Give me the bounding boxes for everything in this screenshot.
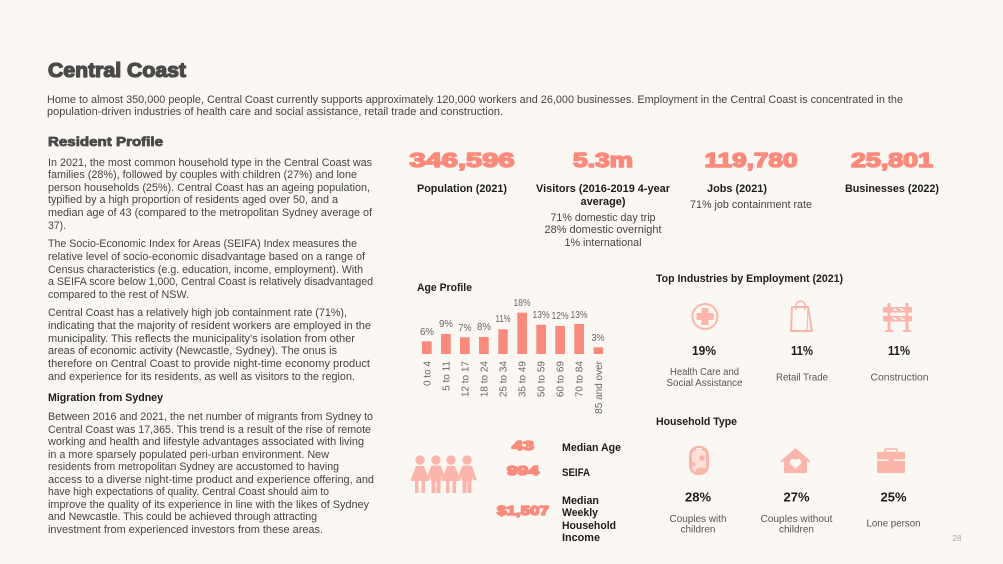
resident profile text: areas of economic activity (Newcastle, Sydney). The onus is bbox=[48, 345, 337, 357]
icon: house with heart bbox=[780, 448, 810, 473]
household: couples with children bbox=[670, 446, 726, 536]
household: couples without children: 27% bbox=[784, 490, 810, 504]
stat: visitors bbox=[536, 150, 671, 249]
stat: median age: Median Age bbox=[562, 442, 621, 454]
industry: construction: 11% bbox=[888, 343, 910, 358]
intro text bbox=[47, 94, 903, 118]
migration text bbox=[47, 411, 374, 536]
industry: retail trade bbox=[776, 301, 828, 384]
migration text: Between 2016 and 2021, the net number of migrants from Sydney to bbox=[48, 411, 373, 423]
resident profile text: indicating that the majority of resident workers are employed in the bbox=[48, 320, 371, 332]
household: lone person: 25% bbox=[880, 490, 907, 504]
bar chart: age profile: 70 to 84 bbox=[574, 361, 586, 397]
bar chart: age profile: 5 to 11 bbox=[442, 361, 452, 391]
stat: visitors: Visitors (2016-2019 4-year bbox=[536, 183, 671, 195]
bar chart: age profile: 18 to 24 bbox=[480, 361, 490, 397]
bar chart: age profile: 25 to 34 bbox=[498, 361, 510, 397]
resident profile text: 37). bbox=[48, 220, 66, 232]
stat: median weekly household income: Income bbox=[562, 532, 600, 544]
heading: migration from sydney: Migration from Sydney bbox=[48, 392, 164, 404]
stat: businesses: 25,801 bbox=[851, 150, 933, 172]
migration text: investment from experienced investors from these areas. bbox=[48, 524, 323, 536]
industry: construction: Construction bbox=[870, 372, 928, 384]
stat: visitors: average) bbox=[580, 196, 626, 208]
stat: population: 346,596 bbox=[410, 150, 514, 172]
industry: retail trade: 11% bbox=[791, 343, 813, 358]
stat: median age bbox=[512, 438, 621, 454]
icon: group of people bbox=[411, 455, 475, 493]
bar chart: age profile: 7% bbox=[458, 323, 472, 334]
bar chart: age profile: 3% bbox=[592, 333, 605, 344]
bar chart: age profile: 18% bbox=[514, 298, 531, 309]
household: couples without children: children bbox=[779, 524, 814, 536]
resident profile text: typified by a high proportion of residents aged over 50, and a bbox=[48, 194, 339, 206]
resident profile text: therefore on Central Coast to provide night-time economy product bbox=[48, 358, 370, 370]
stat: population: Population (2021) bbox=[417, 183, 507, 195]
resident profile text: a SEIFA score below 1,000, Central Coast is relatively disadvantaged bbox=[48, 276, 373, 288]
migration text: have high expectations of quality. Central Coast should aim to bbox=[48, 486, 329, 498]
bar chart: age profile: 8% bbox=[477, 322, 491, 333]
heading: household type: Household Type bbox=[656, 416, 737, 428]
migration text: in a more sparsely populated peri-urban environment. New bbox=[48, 449, 329, 461]
heading: resident profile: Resident Profile bbox=[48, 134, 163, 149]
stat: population bbox=[410, 150, 514, 195]
page number: 28 bbox=[953, 534, 962, 543]
bar chart: age profile: 13% bbox=[570, 310, 588, 321]
resident profile text: municipality. This reflects the municipality's isolation from other bbox=[48, 333, 355, 345]
industry: health care bbox=[666, 304, 743, 389]
household: couples without children: Couples without bbox=[760, 514, 833, 525]
stat: businesses bbox=[845, 150, 939, 195]
heading: age profile: Age Profile bbox=[417, 282, 472, 294]
household: couples with children: 28% bbox=[685, 490, 711, 504]
stat: seifa bbox=[507, 463, 590, 479]
resident profile text bbox=[48, 157, 373, 383]
household: lone person: Lone person bbox=[866, 518, 920, 530]
industry: retail trade: Retail Trade bbox=[776, 372, 828, 384]
bar chart: age profile: 6% bbox=[420, 327, 434, 338]
household: couples without children bbox=[760, 448, 833, 536]
resident profile text: Central Coast has a relatively high job containment rate (71%), bbox=[48, 307, 347, 319]
icon: road barrier bbox=[883, 303, 912, 332]
resident profile text: relative level of socio-economic disadvantage based on a range of bbox=[48, 251, 366, 263]
stat: jobs: Jobs (2021) bbox=[707, 183, 767, 195]
stat: median weekly household income bbox=[497, 495, 616, 544]
household: couples with children: Couples with bbox=[670, 514, 726, 525]
migration text: residents from metropolitan Sydney are accustomed to having bbox=[48, 461, 339, 473]
resident profile text: person households (25%). Central Coast has an ageing population, bbox=[48, 182, 370, 194]
bar chart: age profile: 11% bbox=[496, 314, 511, 325]
stat: median weekly household income: $1,507 bbox=[497, 503, 549, 518]
resident profile text: Census characteristics (e.g. education, income, employment). With bbox=[48, 264, 363, 276]
stat: median weekly household income: Weekly bbox=[562, 507, 599, 519]
bar chart: age profile: 85 and over bbox=[594, 360, 605, 414]
resident profile text: and experience for its residents, as well as visitors to the region. bbox=[48, 371, 355, 383]
stat: seifa: SEIFA bbox=[562, 467, 590, 479]
icon: briefcase bbox=[877, 449, 905, 473]
icon: shopping bag bbox=[791, 301, 812, 331]
stat: jobs: 71% job containment rate bbox=[690, 199, 812, 211]
migration text: working and health and lifestyle advantages associated with living bbox=[47, 436, 364, 448]
bar chart: age profile bbox=[420, 298, 605, 414]
bar chart: age profile: 0 to 4 bbox=[422, 361, 434, 386]
stat: visitors: 71% domestic day trip bbox=[550, 212, 656, 224]
bar chart: age profile: 35 to 49 bbox=[518, 361, 528, 397]
title: Central Coast bbox=[48, 60, 186, 82]
stat: visitors: 1% international bbox=[564, 237, 642, 249]
household: lone person bbox=[866, 449, 920, 530]
industry: health care: Health Care and bbox=[670, 367, 739, 378]
bar chart: age profile: 50 to 59 bbox=[536, 361, 548, 397]
stat: visitors: 5.3m bbox=[573, 150, 633, 172]
stat: visitors: 28% domestic overnight bbox=[544, 224, 662, 236]
stat: seifa: 994 bbox=[507, 463, 540, 478]
stat: jobs bbox=[690, 150, 812, 211]
industry: health care: 19% bbox=[692, 343, 716, 358]
resident profile text: compared to the rest of NSW. bbox=[48, 289, 189, 301]
industry: construction bbox=[870, 303, 928, 384]
migration text: Central Coast was 17,365. This trend is a result of the rise of remote bbox=[48, 424, 371, 436]
migration text: access to a diverse night-time product and experience offering, and bbox=[48, 474, 374, 486]
bar chart: age profile: 13% bbox=[532, 310, 550, 321]
resident profile text: The Socio-Economic Index for Areas (SEIFA) Index measures the bbox=[48, 238, 357, 250]
resident profile text: families (28%), followed by couples with children (27%) and lone bbox=[48, 169, 357, 181]
stat: median weekly household income: Household bbox=[562, 520, 616, 532]
stat: jobs: 119,780 bbox=[704, 150, 798, 172]
resident profile text: median age of 43 (compared to the metropolitan Sydney average of bbox=[48, 207, 373, 219]
industry: health care: Social Assistance bbox=[666, 378, 743, 389]
household: couples with children: children bbox=[680, 524, 716, 536]
intro text: population-driven industries of health care and social assistance, retail trade and construction. bbox=[47, 106, 503, 118]
bar chart: age profile: 9% bbox=[439, 319, 453, 330]
bar chart: age profile: 60 to 69 bbox=[556, 361, 566, 397]
bar chart: age profile: 12 to 17 bbox=[460, 361, 472, 397]
stat: median age: 43 bbox=[512, 438, 534, 453]
migration text: improve the quality of its experience in line with the likes of Sydney bbox=[48, 499, 369, 511]
icon: medical cross bbox=[692, 304, 718, 329]
migration text: and Newcastle. This could be achieved through attracting bbox=[48, 511, 317, 523]
intro text: Home to almost 350,000 people, Central Coast currently supports approximately 120,000 workers and 26,000 businesses. Employment in the Central Coast is concentrated in the bbox=[47, 94, 903, 106]
stat: businesses: Businesses (2022) bbox=[845, 183, 939, 195]
heading: top industries: Top Industries by Employment (2021) bbox=[656, 273, 843, 285]
icon: window bbox=[689, 446, 709, 475]
bar chart: age profile: 12% bbox=[552, 311, 569, 322]
resident profile text: In 2021, the most common household type in the Central Coast was bbox=[48, 157, 372, 169]
stat: median weekly household income: Median bbox=[562, 495, 599, 507]
